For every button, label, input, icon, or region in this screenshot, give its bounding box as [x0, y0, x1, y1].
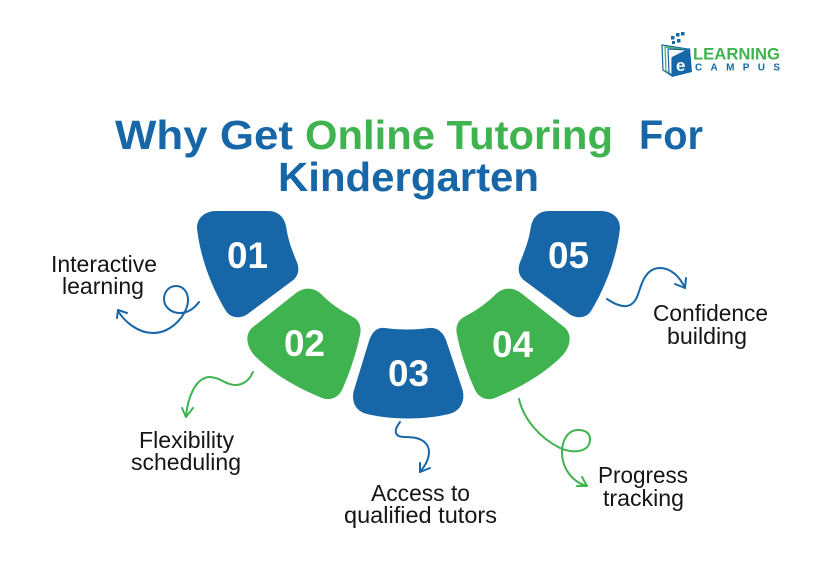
step 05 badge: 05: [548, 235, 589, 276]
label: Progress tracking: tracking: [603, 485, 684, 511]
label: Flexibility scheduling: Flexibility: [139, 427, 234, 453]
title line 1: Why Get: Why Get: [115, 112, 293, 158]
step 02 badge: 02: [284, 323, 325, 364]
label: Confidence building: Confidence: [653, 300, 768, 326]
title line 1: For: For: [639, 112, 703, 158]
icon: pixel dots: [671, 32, 684, 44]
label: Access to qualified tutors: qualified tutors: [344, 502, 497, 528]
label: Progress tracking: [598, 462, 688, 511]
title line 2: Kindergarten: Kindergarten: [278, 154, 539, 200]
step 01 badge: [197, 211, 298, 317]
label: Interactive learning: [51, 251, 157, 299]
icon: book with e: e: [676, 56, 685, 75]
label: Confidence building: [653, 300, 768, 349]
title: [115, 112, 703, 200]
label: Flexibility scheduling: scheduling: [131, 449, 241, 475]
arrow: 01 to Interactive learning: [117, 286, 199, 333]
arrow: 04 to Progress tracking: [519, 399, 590, 486]
label: Flexibility scheduling: [131, 427, 241, 475]
arrow: 03 to Access to qualified tutors: [396, 422, 430, 472]
logo wordmark: CAMPUS: CAMPUS: [695, 62, 780, 74]
step 01 badge: 01: [227, 235, 268, 276]
label: Progress tracking: Progress: [598, 462, 688, 488]
step 03 badge: 03: [388, 353, 429, 394]
arrow: 02 to Flexibility scheduling: [182, 372, 253, 417]
step 02 badge: [247, 289, 361, 399]
step 04 badge: 04: [492, 324, 533, 365]
label: Confidence building: building: [667, 323, 747, 349]
title highlight: Online Tutoring: Online Tutoring: [305, 112, 613, 158]
logo wordmark: LEARNING: LEARNING: [693, 44, 780, 64]
label: Interactive learning: Interactive: [51, 251, 157, 277]
step 05 badge: [519, 211, 620, 317]
label: Interactive learning: learning: [62, 273, 144, 299]
logo: eLearning Campus: [662, 32, 780, 77]
label: Access to qualified tutors: [344, 480, 497, 528]
step 03 badge: [353, 328, 463, 418]
step 04 badge: [456, 289, 570, 399]
label: Access to qualified tutors: Access to: [371, 480, 470, 506]
arrow: 05 to Confidence building: [607, 268, 686, 306]
